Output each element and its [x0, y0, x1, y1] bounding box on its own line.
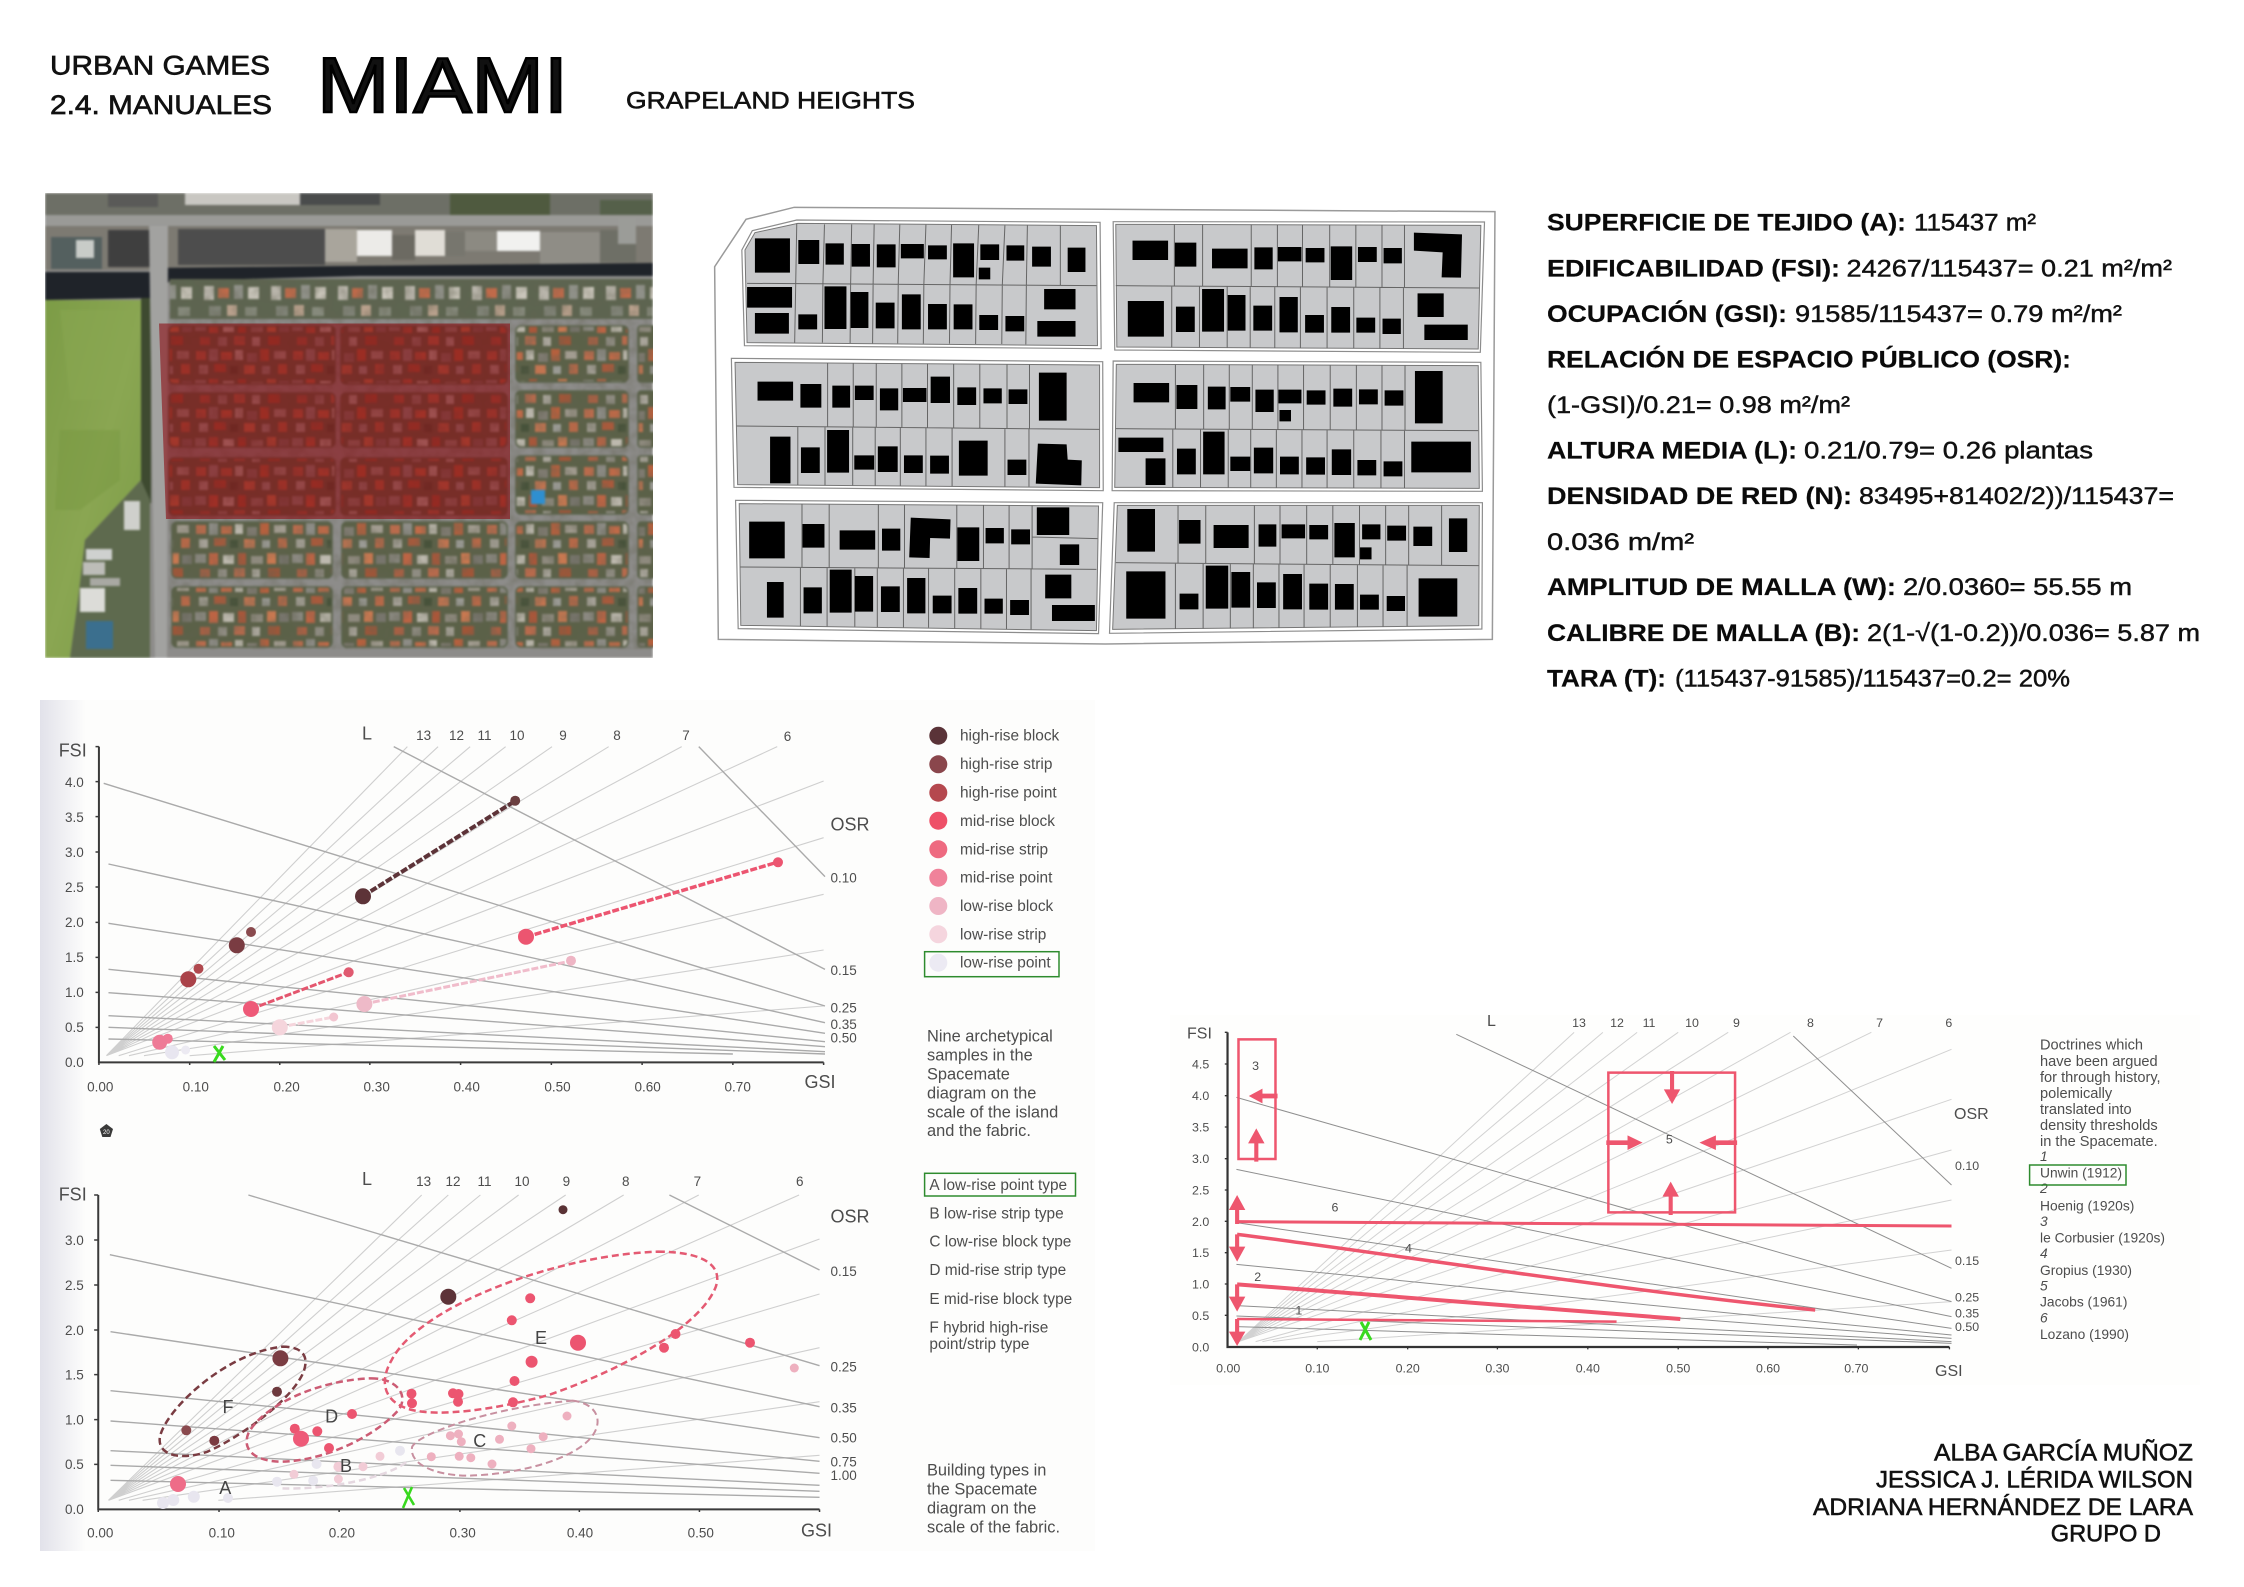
chart 1 axis labels: 0.50 [544, 1080, 571, 1095]
chart 1 dashed ranges [251, 801, 778, 1027]
text block: doctrines list: le Corbusier (1920s) [2040, 1231, 2165, 1246]
chart 2 axis labels: 0.0 [65, 1502, 84, 1517]
chart 2 grid: L rays and OSR lines [94, 1195, 820, 1512]
chart 1 axis labels: 6 [784, 729, 791, 744]
chart 2 axis labels [59, 1169, 870, 1541]
chart 1 axis labels: 3.5 [65, 810, 84, 825]
text block: nine archetypical samples: samples in the [927, 1046, 1033, 1064]
chart 1 axis labels: FSI [59, 741, 87, 761]
text block: doctrines list: 3 [2040, 1214, 2048, 1229]
chart: spacemate doctrines [1170, 1013, 2200, 1385]
chart 2 axis labels: 1.00 [830, 1468, 857, 1483]
chart 1 axis labels: 1.5 [65, 950, 84, 965]
title block: urban games manuales [50, 51, 272, 120]
text block: doctrines list: 1 [2040, 1149, 2048, 1164]
chart 3 doctrine numbers: 5 [1666, 1132, 1673, 1146]
text block: nine archetypical samples: scale of the island [927, 1103, 1058, 1121]
chart 3 axis labels: 11 [1643, 1016, 1656, 1030]
text block: doctrines list: 6 [2040, 1311, 2048, 1326]
doctrine 6: Lozano line [1229, 1195, 1952, 1226]
chart 1 axis labels: 2.5 [65, 880, 84, 895]
chart 1 sample dots [152, 796, 783, 1059]
chart 3 axis labels: 10 [1685, 1016, 1699, 1030]
chart 2 axis labels: 0.00 [87, 1525, 113, 1540]
chart 2 axis labels: L [362, 1169, 372, 1189]
credits: authors: JESSICA J. LÉRIDA WILSON [1876, 1467, 2193, 1494]
map: block centre-west [731, 358, 1103, 491]
text block: doctrines list: Gropius (1930) [2040, 1263, 2132, 1278]
legend: building types: F hybrid high-rise [929, 1319, 1048, 1336]
chart 3 doctrine numbers [1252, 1059, 1673, 1318]
text block: doctrines list: have been argued [2040, 1054, 2158, 1070]
panel: urban indicators text: (115437-91585)/115437=0.2= 20% [1675, 666, 2070, 693]
text block: doctrines list: Hoenig (1920s) [2040, 1199, 2134, 1214]
aerial: blue pool roof [531, 490, 545, 504]
chart 3 background [1170, 1015, 2200, 1385]
chart 2 axis labels: 2.5 [65, 1278, 84, 1293]
panel: urban indicators text: TARA (T): [1547, 666, 1666, 693]
chart 3 axis labels: GSI [1935, 1363, 1963, 1380]
chart 3 doctrine numbers: 2 [1254, 1270, 1261, 1284]
title block: urban games manuales: 2.4. MANUALES [50, 90, 272, 120]
panel: urban indicators text: RELACIÓN DE ESPACIO PÚBLICO (OSR): [1547, 346, 2071, 374]
chart 2 dashed type ellipses [160, 1252, 717, 1488]
chart 2 type letters: D [325, 1407, 338, 1427]
legend: building archetypes: mid-rise point [960, 870, 1053, 887]
chart 2 axis labels: 1.5 [65, 1368, 84, 1383]
credits: authors [1813, 1440, 2193, 1548]
legend: building archetypes: mid-rise block [960, 813, 1055, 830]
chart 1 axis labels: 0.20 [273, 1080, 300, 1095]
chart 3 axis labels: 2.0 [1192, 1215, 1209, 1229]
chart 2 type letters [219, 1328, 547, 1498]
panel: urban indicators text: AMPLITUD DE MALLA (W): [1547, 574, 1896, 601]
panel: urban indicators text [1547, 210, 2200, 693]
chart 3 axis labels: 0.15 [1955, 1254, 1979, 1268]
chart 3 axis labels: 4.5 [1192, 1058, 1209, 1072]
chart 2 axis labels: 0.15 [830, 1264, 857, 1279]
panel: urban indicators text: 91585/115437= 0.79 m²/m² [1795, 301, 2122, 328]
doctrine 4: Gropius line [1229, 1234, 1815, 1310]
chart 2 type letters: F [222, 1397, 234, 1417]
chart 2 type letters: A [219, 1478, 231, 1498]
text block: doctrines list: translated into [2040, 1102, 2132, 1118]
chart 3 doctrine thresholds and arrows [1229, 1039, 1952, 1346]
chart 1 axis labels: 0.70 [725, 1080, 751, 1095]
chart 3 axis labels: 0.50 [1955, 1320, 1979, 1334]
map: block north-east [1113, 222, 1484, 352]
chart 2 axis labels: 9 [563, 1174, 570, 1189]
chart 1 axis labels: 12 [449, 728, 464, 743]
text block: nine archetypical samples: diagram on the [927, 1084, 1036, 1102]
legend: building archetypes: high-rise block [960, 728, 1060, 745]
chart 2 axis labels: 0.40 [567, 1525, 593, 1540]
legend: building archetypes: mid-rise strip [960, 841, 1048, 858]
chart 3 doctrine numbers: 6 [1332, 1200, 1339, 1214]
chart 3 axis labels: 0.35 [1955, 1307, 1979, 1321]
chart: spacemate building types [59, 1169, 870, 1541]
aerial: mottled vegetation texture [169, 279, 653, 649]
chart 2 axis labels: 3.0 [65, 1233, 84, 1248]
panel: urban indicators text: EDIFICABILIDAD (FSI): [1547, 256, 1840, 283]
text block: doctrines list: density thresholds [2040, 1118, 2158, 1134]
chart 2 axis labels: 11 [477, 1174, 492, 1189]
text block: building types caption: diagram on the [927, 1499, 1036, 1517]
chart 3 doctrine numbers: 3 [1252, 1059, 1259, 1073]
chart 1 axis labels: 0.60 [634, 1080, 661, 1095]
icon: green x marker chart 2 [403, 1487, 414, 1508]
chart 1 axis labels: 4.0 [65, 775, 84, 790]
aerial: canal [45, 263, 653, 300]
legend: building archetypes [925, 727, 1060, 977]
chart 3 axis labels [1187, 1013, 1989, 1380]
chart 3 axis labels: 0.70 [1844, 1362, 1868, 1376]
chart 2 axis labels: FSI [59, 1185, 87, 1205]
chart 1 axis labels: 2.0 [65, 915, 84, 930]
panel: urban indicators text: DENSIDAD DE RED (N): [1547, 483, 1852, 510]
map: block south-west [736, 500, 1103, 634]
chart 1 grid: L rays and OSR lines [96, 747, 825, 1065]
chart 1 axis labels: 0.10 [183, 1080, 209, 1095]
chart 3 axis labels: 13 [1572, 1016, 1586, 1030]
chart 1 axis labels: 8 [613, 728, 621, 743]
aerial: residential blocks [169, 326, 656, 647]
chart 2 axis labels: 1.0 [65, 1413, 84, 1428]
panel: aerial photograph with highlighted fabric [45, 193, 656, 658]
text block: doctrines list: Lozano (1990) [2040, 1327, 2129, 1342]
credits: authors: GRUPO D [2051, 1521, 2161, 1548]
chart 1 axis labels: 0.30 [364, 1080, 390, 1095]
subtitle: Grapeland Heights: GRAPELAND HEIGHTS [626, 88, 915, 114]
chart 1 axis labels: 13 [416, 728, 431, 743]
chart 3 axis labels: 0.10 [1305, 1362, 1329, 1376]
text block: nine archetypical samples: and the fabric. [927, 1122, 1031, 1140]
chart 1 axis labels: 0.0 [65, 1055, 84, 1070]
legend: building types: D mid-rise strip type [929, 1262, 1066, 1279]
aerial: golf course [45, 298, 151, 658]
chart 3 axis labels: 1.5 [1192, 1246, 1209, 1260]
legend: building types [925, 1173, 1076, 1353]
chart 3 axis labels: 0.20 [1396, 1362, 1420, 1376]
text block: doctrines list: 2 [2039, 1181, 2048, 1196]
chart 2 axis labels: 0.35 [830, 1401, 857, 1416]
aerial: north-south road [149, 226, 168, 658]
text block: doctrines list: Jacobs (1961) [2040, 1295, 2127, 1310]
title: Miami: MIAMI [317, 41, 568, 129]
chart 3 axis labels: FSI [1187, 1025, 1212, 1042]
panel: urban indicators text: SUPERFICIE DE TEJIDO (A): [1547, 210, 1906, 237]
panel: urban indicators text: 2/0.0360= 55.55 m [1903, 574, 2132, 601]
chart 2 axis labels: 0.50 [688, 1525, 714, 1540]
chart 3 axis labels: 0.25 [1955, 1291, 1979, 1305]
chart 3 axis labels: 12 [1610, 1016, 1624, 1030]
chart 3 doctrine numbers: 1 [1295, 1304, 1302, 1318]
chart 2 axis labels: 0.10 [209, 1525, 235, 1540]
text block: doctrines list: 4 [2040, 1246, 2048, 1261]
panel: urban indicators text: CALIBRE DE MALLA (B): [1547, 620, 1860, 647]
chart 1 axis labels: 1.0 [65, 985, 84, 1000]
legend: building archetypes: high-rise point [960, 785, 1057, 802]
text block: nine archetypical samples: Spacemate [927, 1065, 1010, 1083]
icon: page number pentagon [100, 1124, 113, 1137]
text block: doctrines list: 5 [2040, 1279, 2048, 1294]
chart 3 axis labels: 0.10 [1955, 1159, 1979, 1173]
panel: urban indicators text: 24267/115437= 0.21 m²/m² [1846, 256, 2172, 283]
aerial: red fabric overlay [159, 324, 510, 519]
map: block south-east [1110, 503, 1482, 633]
panel: urban indicators text: OCUPACIÓN (GSI): [1547, 300, 1787, 328]
chart 2 axis labels: 13 [416, 1174, 431, 1189]
legend: building types: C low-rise block type [929, 1234, 1071, 1251]
text block: building types caption: the Spacemate [927, 1481, 1037, 1499]
chart 2 axis labels: GSI [801, 1521, 832, 1541]
aerial: houses north of fabric [170, 279, 653, 319]
chart 3 grid: L rays and OSR lines [1225, 1032, 1952, 1349]
chart 3 axis labels: 1.0 [1192, 1278, 1209, 1292]
chart 1 axis labels: 11 [477, 728, 492, 743]
legend: building archetypes: low-rise point [960, 955, 1051, 972]
chart 2 axis labels: 0.75 [830, 1455, 857, 1470]
text block: doctrines list: for through history, [2040, 1070, 2161, 1086]
icon: green x marker chart 3 [1360, 1322, 1371, 1340]
legend: building types: E mid-rise block type [929, 1291, 1072, 1308]
chart 3 axis labels: OSR [1954, 1106, 1989, 1123]
chart: spacemate archetypes [59, 723, 870, 1095]
legend: building types: B low-rise strip type [929, 1205, 1064, 1222]
map: block north-west [742, 220, 1101, 349]
chart 3 axis labels: 3.5 [1192, 1120, 1209, 1134]
panel: urban indicators text: 0.036 m/m² [1547, 529, 1694, 556]
chart 2 axis labels: 10 [514, 1174, 530, 1189]
chart 2 sample dots [157, 1205, 799, 1509]
chart 2 axis labels: 0.25 [830, 1360, 857, 1375]
panel: scanned spacemate background left [40, 700, 1095, 1551]
chart 2 axis labels: 0.20 [329, 1525, 355, 1540]
chart 1 axis labels: GSI [804, 1072, 836, 1092]
chart 3 axis labels: 0.00 [1216, 1362, 1240, 1376]
title block: urban games manuales: URBAN GAMES [50, 51, 270, 81]
chart 2 axis labels: 7 [694, 1174, 701, 1189]
chart 1 axis labels: 7 [682, 728, 690, 743]
map: block centre-east [1112, 361, 1482, 491]
legend: building archetypes: low-rise strip [960, 926, 1046, 943]
chart 1 axis labels: 0.10 [830, 871, 857, 886]
text block: building types caption: scale of the fabric. [927, 1518, 1060, 1536]
panel: urban indicators text: 0.21/0.79= 0.26 plantas [1804, 438, 2093, 465]
panel: figure-ground cadastral map [715, 207, 1495, 644]
chart 3 axis labels: 2.5 [1192, 1184, 1209, 1198]
chart 3 axis labels: 9 [1733, 1016, 1740, 1030]
chart 1 axis labels: 0.40 [454, 1080, 480, 1095]
chart 2 axis labels: 0.5 [65, 1457, 84, 1472]
chart 1 axis labels [59, 723, 870, 1095]
chart 2 axis labels: 8 [622, 1174, 629, 1189]
chart 2 type letters: B [340, 1456, 352, 1476]
text block: nine archetypical samples [927, 1027, 1058, 1140]
chart 1 axis labels: 0.15 [830, 963, 857, 978]
text block: nine archetypical samples: Nine archetypical [927, 1027, 1053, 1045]
chart 1 axis labels: 0.5 [65, 1020, 84, 1035]
chart 3 axis labels: 4.0 [1192, 1089, 1209, 1103]
panel: urban indicators text: (1-GSI)/0.21= 0.98 m²/m² [1547, 392, 1850, 419]
chart 3 axis labels: 0.40 [1576, 1362, 1600, 1376]
panel: urban indicators text: 2(1-√(1-0.2))/0.036= 5.87 m [1867, 620, 2200, 647]
chart 3 axis labels: L [1487, 1013, 1496, 1030]
chart 2 axis labels: OSR [830, 1207, 870, 1227]
chart 2 axis labels: 6 [796, 1174, 804, 1189]
credits: authors: ADRIANA HERNÁNDEZ DE LARA [1813, 1494, 2193, 1521]
chart 3 doctrine numbers: 4 [1405, 1242, 1412, 1256]
chart 3 axis labels: 0.60 [1756, 1362, 1780, 1376]
chart 2 type letters: C [473, 1431, 486, 1451]
chart 1 axis labels: 0.25 [830, 1001, 857, 1016]
panel: urban indicators text: 115437 m² [1914, 210, 2036, 237]
text block: doctrines list [2030, 1037, 2165, 1342]
chart 1 axis labels: 9 [559, 728, 567, 743]
chart 1 axis labels: 0.50 [830, 1030, 857, 1045]
chart 1 axis labels: L [362, 723, 372, 743]
chart 1 axis labels: 0.00 [87, 1080, 113, 1095]
chart 3 axis labels: 7 [1876, 1016, 1883, 1030]
chart 1 axis labels: OSR [830, 815, 870, 835]
doctrine 1: Unwin line [1229, 1319, 1617, 1346]
text block: building types caption [927, 1462, 1060, 1536]
aerial: north industrial band [45, 193, 653, 270]
legend: building types: point/strip type [929, 1336, 1029, 1353]
icon: page number pentagon: 20 [103, 1130, 110, 1136]
doctrine 3: le Corbusier box [1238, 1039, 1278, 1162]
credits: authors: ALBA GARCÍA MUÑOZ [1934, 1440, 2193, 1467]
text block: doctrines list: in the Spacemate. [2040, 1134, 2158, 1150]
text block: doctrines list: Unwin (1912) [2040, 1166, 2122, 1181]
doctrine 5: Jacobs box [1606, 1071, 1737, 1215]
chart 1 axis labels: 0.35 [830, 1017, 857, 1032]
chart 3 axis labels: 3.0 [1192, 1152, 1209, 1166]
doctrine 2: Hoenig line [1229, 1284, 1680, 1319]
map: fabric outer boundary [715, 207, 1495, 644]
panel: urban indicators text: ALTURA MEDIA (L): [1547, 438, 1797, 465]
chart 3 axis labels: 0.5 [1192, 1309, 1209, 1323]
text block: doctrines list: polemically [2040, 1086, 2113, 1102]
chart 1 axis labels: 3.0 [65, 845, 84, 860]
panel: urban indicators text: 83495+81402/2))/115437= [1859, 483, 2174, 510]
chart 2 axis labels: 2.0 [65, 1323, 84, 1338]
legend: building archetypes: low-rise block [960, 898, 1054, 915]
text block: building types caption: Building types in [927, 1462, 1046, 1480]
legend: building types: A low-rise point type [929, 1177, 1067, 1194]
chart 1 axis labels: 10 [509, 728, 525, 743]
chart 3 axis labels: 6 [1945, 1016, 1952, 1030]
chart 3 axis labels: 0.0 [1192, 1340, 1209, 1354]
chart 3 axis labels: 0.50 [1666, 1362, 1690, 1376]
legend: building archetypes: high-rise strip [960, 756, 1052, 773]
chart 3 axis labels: 8 [1807, 1016, 1814, 1030]
chart 2 axis labels: 12 [445, 1174, 461, 1189]
chart 3 axis labels: 0.30 [1485, 1362, 1510, 1376]
icon: green x marker chart 1 [214, 1046, 225, 1062]
chart 2 type letters: E [535, 1328, 547, 1348]
chart 2 axis labels: 0.30 [449, 1525, 476, 1540]
text block: doctrines list: Doctrines which [2040, 1037, 2143, 1053]
chart 2 axis labels: 0.50 [830, 1431, 857, 1446]
